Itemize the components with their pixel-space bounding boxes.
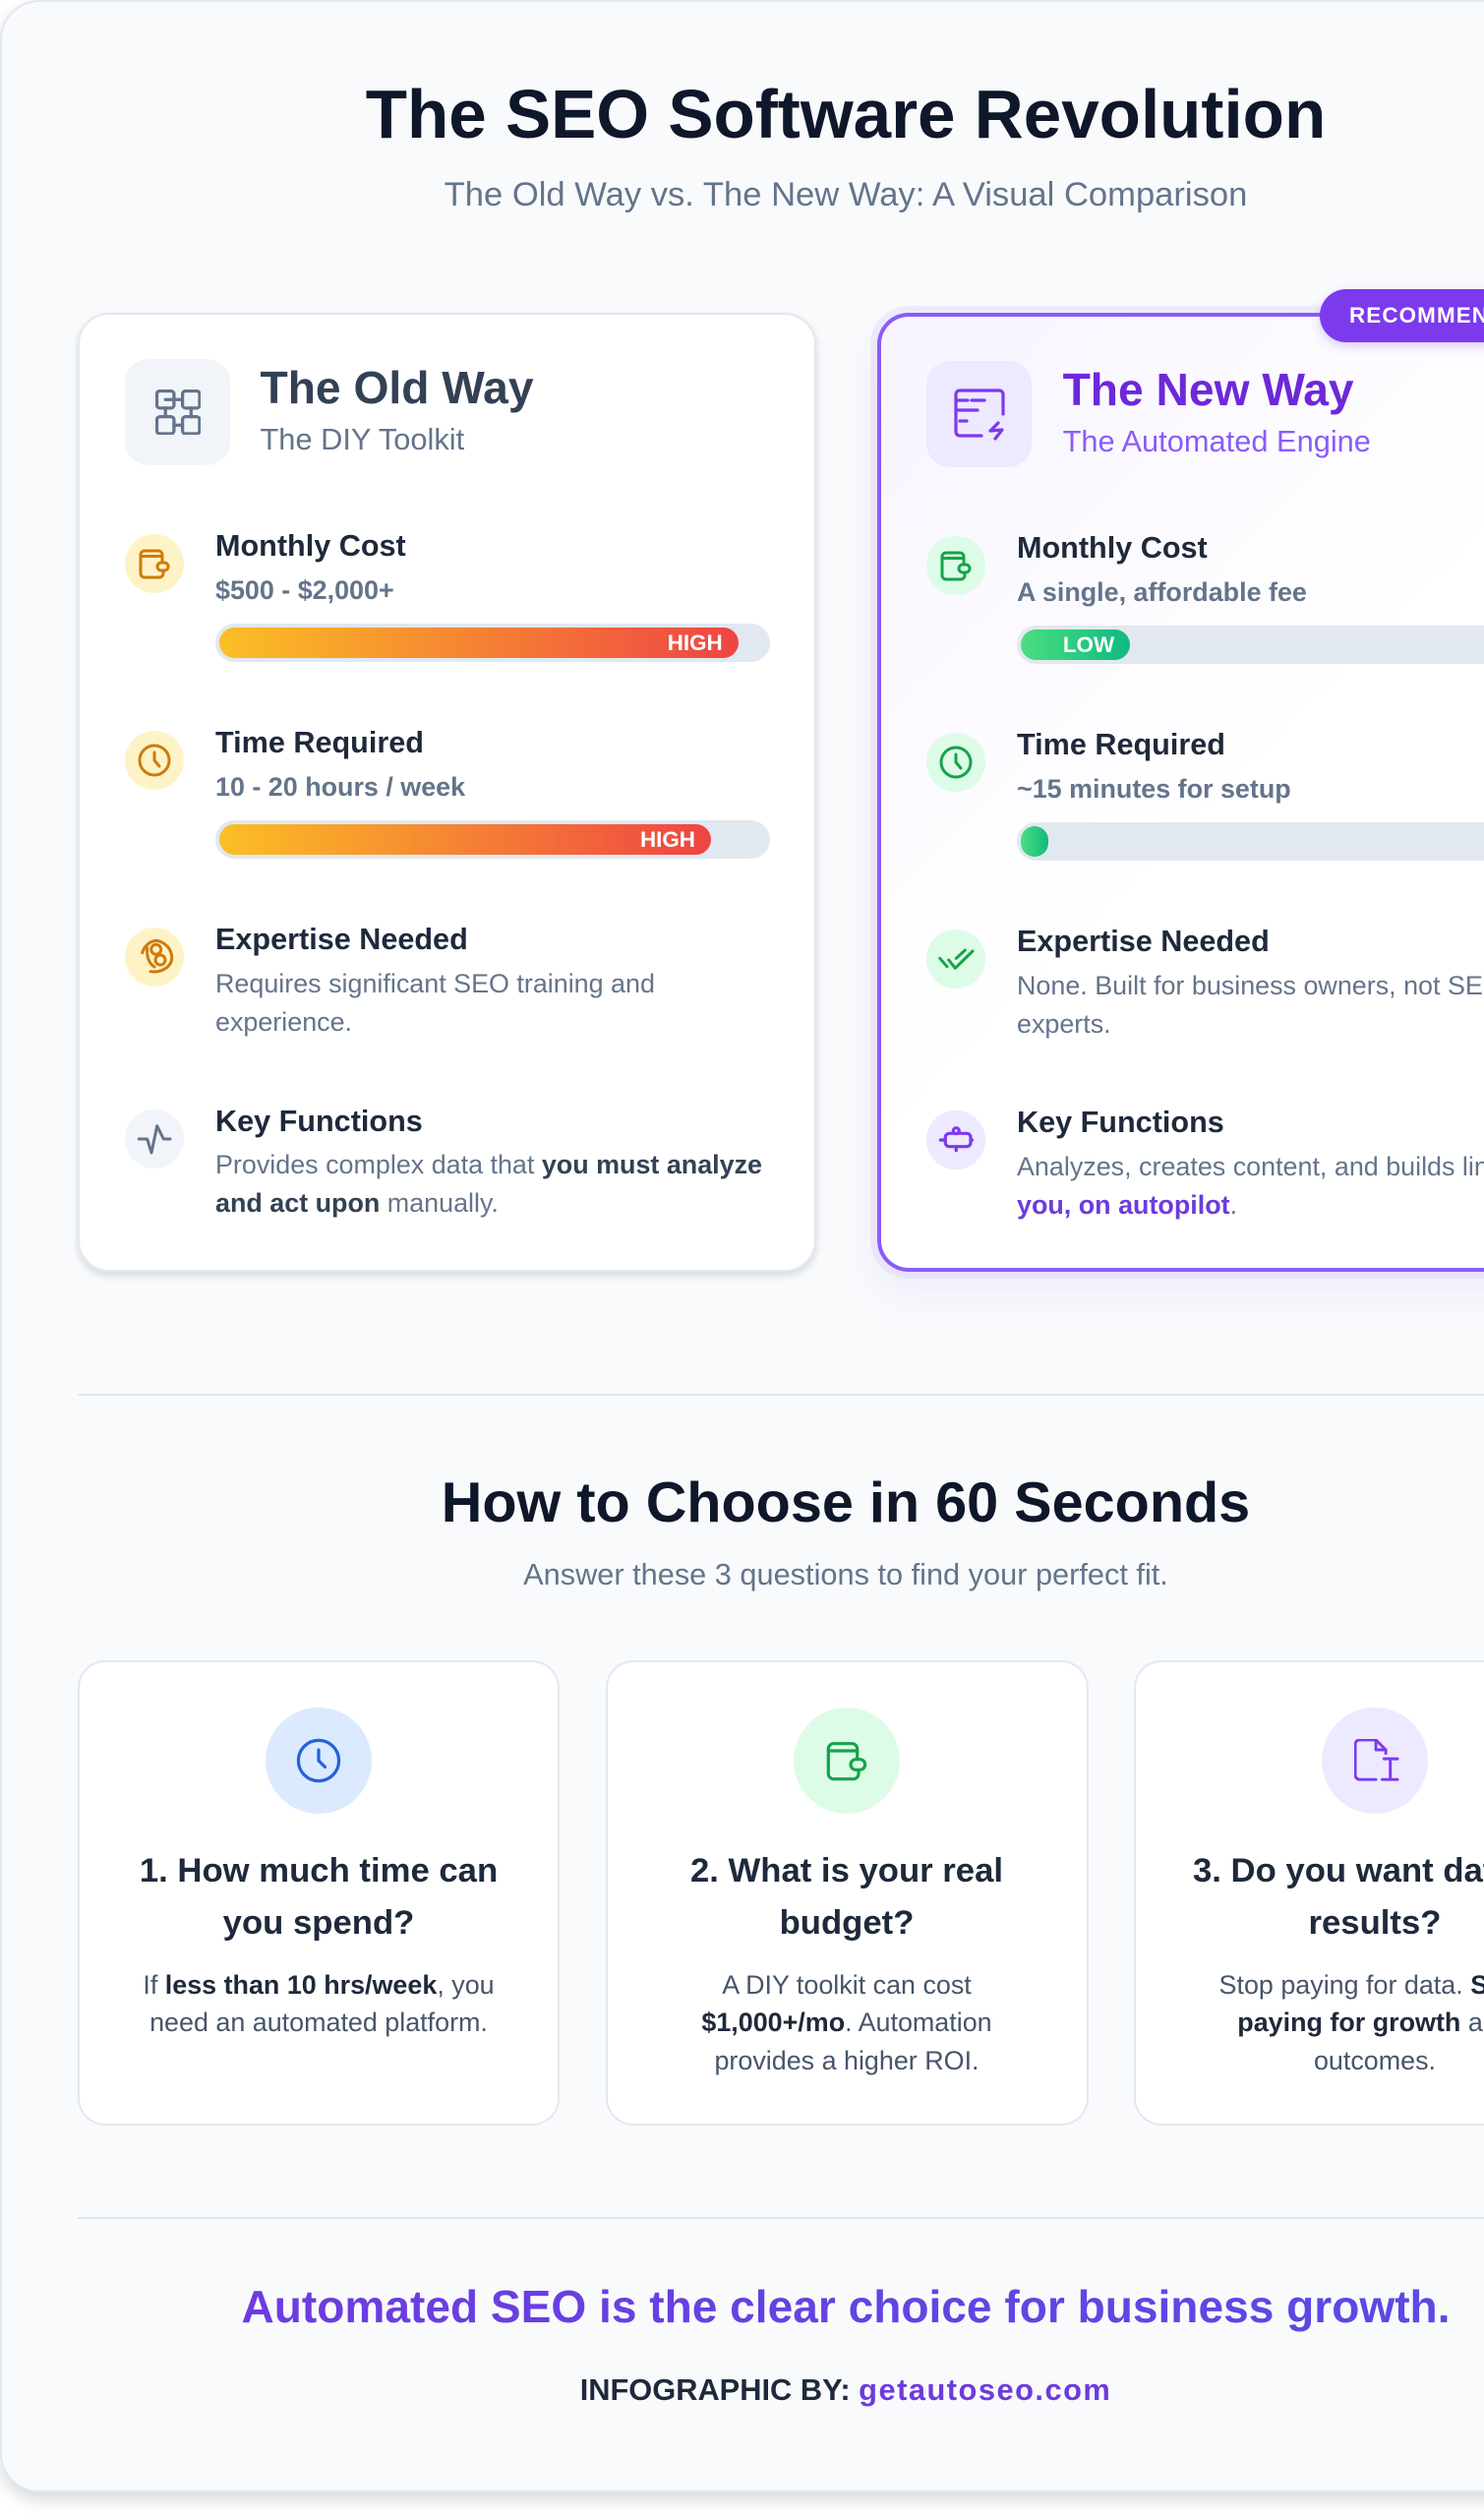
question 3 heading [1193,1851,1484,1942]
expertise label: Expertise Needed [1017,925,1270,958]
expertise description: experience. [215,1007,352,1037]
conclusion: Automated SEO is the clear choice for business growth. [241,2280,1450,2331]
new way heading: The New Way [1063,364,1354,415]
panel: the new way [877,313,1484,1272]
question 3 text [1219,1969,1484,2075]
row: expertise needed [926,925,1484,1039]
question 2 heading [690,1851,1003,1942]
credit line: INFOGRAPHIC BY: getautoseo.com [580,2372,1111,2407]
row: time required [125,726,770,859]
bar: low cost [1017,626,1484,664]
heading: how to choose: How to Choose in 60 Seconds [442,1471,1250,1534]
question 1 text: need an automated platform. [149,2008,488,2037]
expertise description: Requires significant SEO training and [215,968,655,997]
key functions description: you, on autopilot. [1017,1190,1237,1220]
time required label: Time Required [215,726,424,759]
time required value: 10 - 20 hours / week [215,772,465,802]
row: key functions [926,1106,1484,1220]
icon: robot engine [926,1110,985,1169]
bar: low cost: LOW [1063,632,1114,657]
bar: high time: HIGH [640,827,695,852]
badge: recommended [1320,289,1484,342]
expertise description [1017,970,1484,1039]
key functions description [215,1150,762,1218]
key functions description: Provides complex data that you must analyze [215,1150,762,1179]
old way subheading: The DIY Toolkit [260,422,464,456]
question 1 text [143,1969,495,2037]
icon: clock [125,731,184,790]
question 2 text: $1,000+/mo. Automation [701,2008,992,2037]
question 1 heading [140,1851,498,1942]
title: The SEO Software Revolution [366,76,1326,152]
monthly cost value: A single, affordable fee [1017,577,1307,607]
section subtitle: Answer these 3 questions to find your perfect fit. [523,1556,1168,1591]
panel: question 1 [78,1660,560,2125]
bar: high cost [215,624,769,662]
icon: brain swirl [125,928,184,987]
expertise description [215,968,655,1037]
subtitle: The Old Way vs. The New Way: A Visual Comparison [445,176,1247,213]
icon: clock [266,1708,372,1814]
row: expertise needed [125,923,655,1037]
monthly cost label: Monthly Cost [215,529,406,563]
key functions description [1017,1151,1484,1220]
monthly cost value: $500 - $2,000+ [215,575,394,605]
question 2 text [701,1969,992,2075]
question 2 heading: budget? [780,1904,914,1942]
row: key functions [125,1104,762,1218]
key functions description: and act upon manually. [215,1188,499,1218]
question 1 heading: 1. How much time can [140,1851,498,1888]
icon: clock [926,733,985,792]
row: time required [926,728,1484,861]
icon: wallet [926,536,985,595]
icon: automated engine [926,361,1032,467]
row: monthly cost [125,529,770,662]
question 1 text: If less than 10 hrs/week, you [143,1969,495,1999]
key functions label: Key Functions [215,1104,423,1137]
icon: document result [1322,1708,1428,1814]
time required label: Time Required [1017,728,1225,761]
icon: toolkit nodes [125,359,230,465]
bar: high cost: HIGH [668,630,723,655]
question 3 heading: results? [1309,1904,1441,1942]
icon: wallet [794,1708,900,1814]
icon: wallet [125,534,184,593]
expertise label: Expertise Needed [215,923,468,956]
question 3 text: outcomes. [1314,2046,1436,2075]
key functions label: Key Functions [1017,1106,1224,1139]
icon: activity pulse [125,1109,184,1169]
panel: question 2 [606,1660,1088,2125]
question 2 text: A DIY toolkit can cost [722,1969,972,1999]
new way subheading: The Automated Engine [1063,424,1371,458]
question 2 heading: 2. What is your real [690,1851,1003,1888]
question 2 text: provides a higher ROI. [714,2046,979,2075]
old way heading: The Old Way [260,362,534,413]
question 1 heading: you spend? [223,1904,414,1942]
expertise description: experts. [1017,1009,1111,1039]
panel: the old way [78,313,816,1272]
bar: high time [215,820,769,859]
panel: question 3 [1134,1660,1484,2125]
row: monthly cost [926,531,1484,664]
monthly cost label: Monthly Cost [1017,531,1208,565]
icon: double check [926,929,985,989]
bar: minimal time [1017,822,1484,861]
time required value: ~15 minutes for setup [1017,774,1291,804]
